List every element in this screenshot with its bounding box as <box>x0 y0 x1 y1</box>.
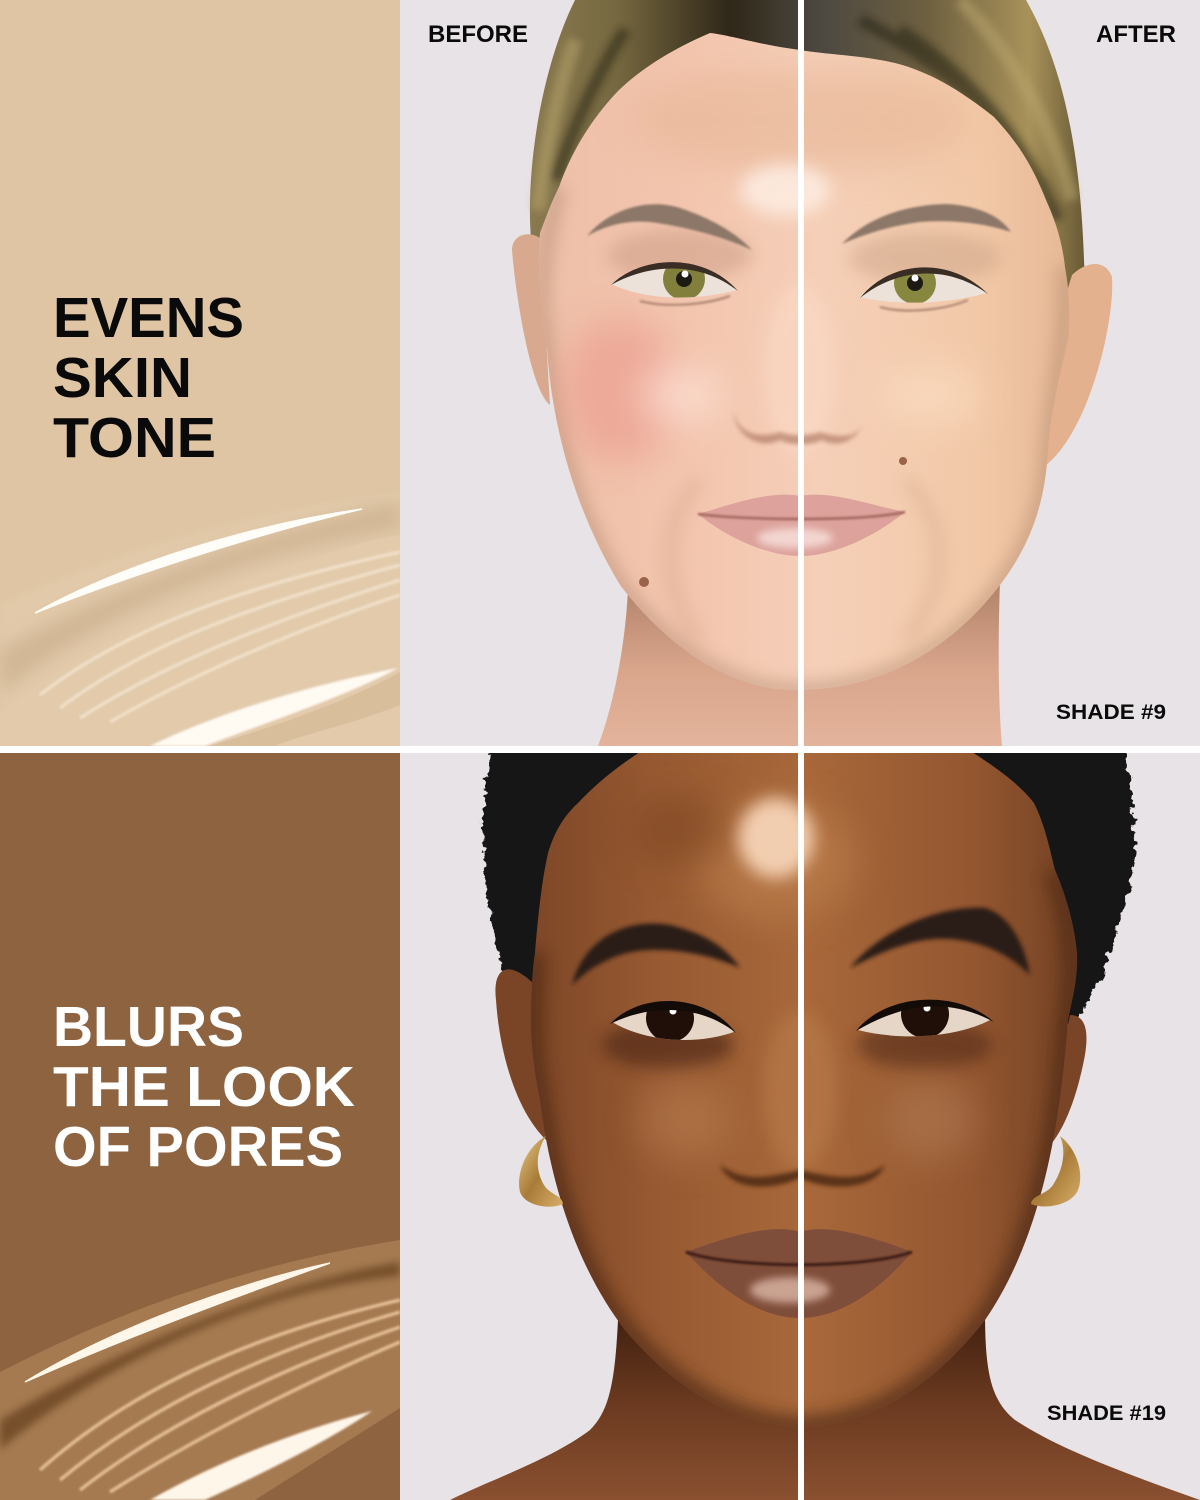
panel: top swatch <box>0 0 400 746</box>
heading: evens skin tone: EVENS <box>53 286 244 350</box>
heading: blurs the look of pores: BLURS <box>53 995 244 1059</box>
panel: bottom swatch <box>0 753 400 1500</box>
hair: top portrait <box>528 0 1084 288</box>
face edge shadow <box>532 870 1074 1427</box>
heading: blurs the look of pores: THE LOOK <box>53 1055 355 1119</box>
shoulders and neck: bottom portrait <box>450 1310 1200 1500</box>
panel: top before and after portrait <box>400 0 1200 746</box>
heading: blurs the look of pores: OF PORES <box>53 1115 343 1179</box>
horizontal divider <box>0 746 1200 753</box>
label: after: AFTER <box>1096 21 1176 48</box>
face: top portrait <box>539 33 1069 690</box>
forehead tone <box>695 800 855 920</box>
hair: bottom portrait <box>483 745 1135 1040</box>
label: shade 9: SHADE #9 <box>1056 701 1166 724</box>
forehead shine <box>738 798 814 878</box>
forehead highlight <box>740 164 830 216</box>
redness: before side <box>562 318 678 462</box>
eyes: top portrait <box>611 258 988 311</box>
face edge shadow <box>542 187 1066 690</box>
heading: evens skin tone: TONE <box>53 406 216 470</box>
earrings <box>519 1136 1080 1207</box>
ears: top portrait <box>512 234 1112 465</box>
eyes: bottom portrait <box>610 1000 994 1040</box>
foundation smear: top <box>0 492 400 746</box>
eye socket shadows <box>608 229 752 281</box>
lips: bottom portrait <box>686 1229 912 1318</box>
heading: evens skin tone: SKIN <box>53 346 192 410</box>
cheek highlight <box>640 365 720 425</box>
moles: top portrait <box>639 457 907 587</box>
heading: evens skin tone <box>54 298 242 458</box>
heading: blurs the look of pores <box>54 1006 354 1166</box>
eye bags <box>602 1021 734 1069</box>
label: before: BEFORE <box>428 21 528 48</box>
smile and chin shading <box>670 480 939 640</box>
eyebrows: bottom portrait <box>572 908 1030 985</box>
before and after vertical divider <box>798 0 804 1500</box>
ears: bottom portrait <box>495 969 1086 1155</box>
forehead tone <box>630 70 970 170</box>
nose: top portrait <box>734 297 860 446</box>
eyebrows: top portrait <box>587 204 1011 250</box>
cheek sheen <box>640 1080 730 1160</box>
foundation smear: bottom <box>0 1240 400 1500</box>
label: shade 19: SHADE #19 <box>1047 1402 1166 1425</box>
face: bottom portrait <box>520 745 1090 1435</box>
panel: bottom before and after portrait <box>400 745 1200 1500</box>
lips: top portrait <box>698 495 905 556</box>
neck: top portrait <box>598 580 1002 746</box>
nose: bottom portrait <box>720 1010 885 1187</box>
